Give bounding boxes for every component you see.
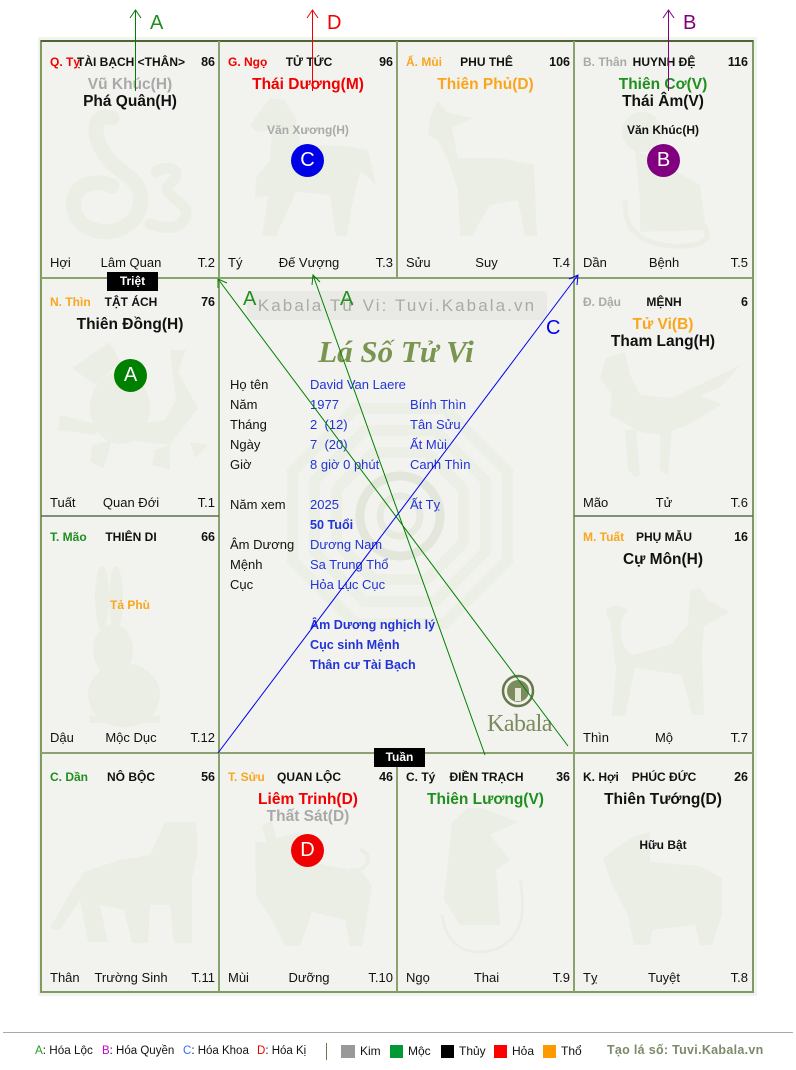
palace: Quan Lộc: D <box>300 839 315 861</box>
palace: Điền Trạch: Ngọ <box>406 970 430 985</box>
palace: Nô Bộc: C. Dần <box>50 770 88 784</box>
palace: Tài Bạch: 86 <box>201 55 215 69</box>
palace: Quan Lộc <box>228 770 393 985</box>
arrow label D top: D <box>327 12 341 34</box>
palace: Phu Thê: 106 <box>549 55 570 69</box>
palace: Phụ Mẫu: Mộ <box>655 730 673 745</box>
palace: Phúc Đức: Hữu Bật <box>639 838 687 852</box>
palace: Huynh Đệ: 116 <box>728 55 748 69</box>
palace: Huynh Đệ: Thái Âm(V) <box>622 93 704 110</box>
palace: Tử Tức: Đế Vượng <box>279 255 339 270</box>
legend divider <box>326 1043 327 1060</box>
legend: five elements: Thủy <box>459 1044 486 1058</box>
palace: Quan Lộc: T. Sửu <box>228 770 265 784</box>
palace: Huynh Đệ: Bệnh <box>649 255 679 270</box>
legend: four transformations: D: Hóa Kị <box>257 1045 306 1057</box>
watermark: dog <box>606 588 730 716</box>
birth information block: Tháng <box>230 417 267 432</box>
legend: five elements: Mộc <box>408 1044 431 1058</box>
legend: four transformations: C: Hóa Khoa <box>183 1045 249 1057</box>
palace: Tật Ách: Thiên Đồng(H) <box>77 316 183 333</box>
logo: Kabala <box>487 674 552 737</box>
palace: Tử Tức: TỬ TỨC <box>286 55 332 69</box>
arrow: D up from Tử Tức <box>307 10 318 91</box>
watermark: rabbit <box>88 566 160 727</box>
legend: five elements: Thổ <box>561 1044 582 1058</box>
palace: Điền Trạch: Thiên Lương(V) <box>427 791 544 808</box>
palace: Huynh Đệ: B <box>657 149 670 171</box>
legend: five elements: Kim <box>360 1044 381 1058</box>
palace: Huynh Đệ: T.5 <box>731 255 748 270</box>
watermark: bagua emblem <box>286 402 514 630</box>
birth information block: Cục <box>230 577 253 592</box>
palace: Huynh Đệ: Thiên Cơ(V) <box>619 76 707 93</box>
palace: Tử Tức: Thái Dương(M) <box>252 76 364 93</box>
palace: Thiên Di: T. Mão <box>50 530 87 544</box>
palace: Mệnh: Mão <box>583 495 608 510</box>
arrow label A right: A <box>340 288 353 310</box>
palace: Huynh Đệ: Văn Khúc(H) <box>627 123 699 137</box>
palace: Điền Trạch: 36 <box>556 770 570 784</box>
palace: Mệnh: T.6 <box>731 495 748 510</box>
palace: Quan Lộc: QUAN LỘC <box>277 770 341 784</box>
birth information block: Giờ <box>230 457 252 472</box>
birth information block: Năm xem <box>230 497 286 512</box>
legend: five elements: Hỏa <box>512 1044 534 1058</box>
palace: Phụ Mẫu: T.7 <box>731 730 748 745</box>
arrow: A to top-left of centre <box>218 279 568 746</box>
marker: Tuần <box>374 748 425 767</box>
arrow label A left: A <box>243 288 256 310</box>
birth information block: Tân Sửu <box>410 417 461 432</box>
palace: Tử Tức <box>228 55 393 270</box>
palace: Phúc Đức: T.8 <box>731 970 748 985</box>
birth information block: 8 giờ 0 phút <box>310 457 379 472</box>
palace: Phu Thê: Sửu <box>406 255 431 270</box>
palace: Mệnh <box>583 295 748 510</box>
palace: Phụ Mẫu: Cự Môn(H) <box>623 551 703 568</box>
watermark: snake <box>74 117 186 232</box>
watermark: horse <box>250 98 376 236</box>
palace: Quan Lộc: Liêm Trinh(D) <box>258 791 358 808</box>
palace: Huynh Đệ: HUYNH ĐỆ <box>633 55 695 69</box>
birth information block: Mệnh <box>230 557 263 572</box>
palace: Phúc Đức: K. Hợi <box>583 770 619 784</box>
palace: Nô Bộc <box>50 770 215 985</box>
arrow label C: C <box>546 317 560 339</box>
palace: Huynh Đệ <box>583 55 748 270</box>
palace: Điền Trạch: Thai <box>474 970 499 985</box>
birth information block: 7 (20) <box>310 437 348 452</box>
birth information block: 50 Tuổi <box>310 518 353 532</box>
palace: Thiên Di: 66 <box>201 530 215 544</box>
palace: Tật Ách: 76 <box>201 295 215 309</box>
palace: Phu Thê: T.4 <box>553 255 570 270</box>
birth information block: 2025 <box>310 497 339 512</box>
marker: Tuần: Tuần <box>386 750 413 764</box>
legend: four transformations <box>35 1044 306 1057</box>
legend: four transformations: A: Hóa Lộc <box>35 1044 93 1057</box>
marker: Triệt: Triệt <box>120 274 145 288</box>
palace: Điền Trạch: C. Tý <box>406 770 435 784</box>
palace: Tử Tức: G. Ngọ <box>228 55 267 69</box>
arrow: A to Đế Vượng <box>312 275 485 755</box>
palace: Tài Bạch <box>50 55 215 270</box>
palace: Tật Ách: TẬT ÁCH <box>105 295 157 309</box>
palace: Thiên Di: T.12 <box>190 730 215 745</box>
palace: Nô Bộc: Trường Sinh <box>94 970 168 985</box>
palace: Tài Bạch: Lâm Quan <box>101 255 161 270</box>
birth information block: Bính Thìn <box>410 397 466 412</box>
birth information block: Năm <box>230 397 257 412</box>
palace: Thiên Di <box>50 530 215 745</box>
palace: Phụ Mẫu: Thìn <box>583 730 609 745</box>
palace: Nô Bộc: NÔ BỘC <box>107 770 155 784</box>
birth information block: Sa Trung Thổ <box>310 557 389 572</box>
palace: Tật Ách: A <box>124 364 137 386</box>
palace: Mệnh: Tham Lang(H) <box>611 333 715 350</box>
arrow: A up from Tài Bạch <box>130 10 141 91</box>
birth information block: Cục sinh Mệnh <box>310 638 400 652</box>
arrow label A top: A <box>150 12 163 34</box>
arrow: C to top-right of centre <box>218 275 578 753</box>
palace: Tử Tức: Văn Xương(H) <box>267 123 349 137</box>
palace: Quan Lộc: T.10 <box>368 970 393 985</box>
palace: Mệnh: Đ. Dậu <box>583 295 621 309</box>
palace: Mệnh: Tử <box>656 495 672 510</box>
palace: Tật Ách: Tuất <box>50 495 76 510</box>
birth information block: David Van Laere <box>310 377 406 392</box>
watermark banner: Kabala Tử Vi: Tuvi.Kabala.vn <box>258 296 536 315</box>
watermark: tiger <box>50 822 198 943</box>
palace: Điền Trạch <box>406 770 570 985</box>
watermark: rooster <box>600 352 740 477</box>
palace: Tài Bạch: T.2 <box>198 255 215 270</box>
palace: Điền Trạch: T.9 <box>553 970 570 985</box>
watermark banner <box>247 291 547 320</box>
palace: Phúc Đức: 26 <box>734 770 748 784</box>
palace: Thiên Di: THIÊN DI <box>105 530 157 544</box>
palace: Nô Bộc: Thân <box>50 970 80 985</box>
palace: Phu Thê: Ấ. Mùi <box>406 55 442 69</box>
legend: five elements <box>341 1044 582 1058</box>
palace: Mệnh: Tử Vi(B) <box>633 316 693 333</box>
palace: Quan Lộc: Mùi <box>228 970 249 985</box>
birth information block: Họ tên <box>230 377 268 392</box>
footer credit: Tạo lá số: Tuvi.Kabala.vn <box>607 1043 764 1057</box>
palace: Phụ Mẫu: M. Tuất <box>583 530 624 544</box>
palace: Tử Tức: 96 <box>379 55 393 69</box>
birth information block: Hỏa Lục Cục <box>310 577 385 592</box>
palace: Điền Trạch: ĐIỀN TRẠCH <box>450 770 524 784</box>
footer rule <box>3 1032 793 1033</box>
birth information block: Ất Tỵ <box>410 497 440 512</box>
watermark: ox <box>255 820 372 946</box>
palace: Phụ Mẫu <box>583 530 748 745</box>
palace: Mệnh: 6 <box>741 295 748 309</box>
palace: Nô Bộc: 56 <box>201 770 215 784</box>
birth information block <box>230 377 470 672</box>
title: Lá Số Tử Vi: Lá Số Tử Vi <box>318 334 474 369</box>
palace: Thiên Di: Tả Phù <box>110 598 150 612</box>
legend: four transformations: B: Hóa Quyền <box>102 1045 174 1057</box>
palace: Quan Lộc: Dưỡng <box>288 970 330 985</box>
watermark: monkey <box>622 112 707 246</box>
birth information block: Âm Dương nghịch lý <box>310 618 435 632</box>
palace: Tật Ách: T.1 <box>198 495 215 510</box>
palace: Thiên Di: Mộc Dục <box>105 730 157 745</box>
palace: Tật Ách <box>50 295 215 510</box>
arrow: B up from Huynh Đệ <box>663 10 674 91</box>
palace: Phụ Mẫu: 16 <box>734 530 748 544</box>
palace: Phúc Đức: PHÚC ĐỨC <box>632 770 696 784</box>
palace: Tử Tức: C <box>300 149 315 171</box>
birth information block: 2 (12) <box>310 417 348 432</box>
palace: Tật Ách: Quan Đới <box>103 495 159 510</box>
palace: Quan Lộc: 46 <box>379 770 393 784</box>
palace: Tài Bạch: Phá Quân(H) <box>83 93 177 110</box>
watermark: rat <box>442 808 523 952</box>
birth information block: Thân cư Tài Bạch <box>310 658 416 672</box>
palace: Huynh Đệ: B. Thân <box>583 55 627 69</box>
palace: Tử Tức: T.3 <box>376 255 393 270</box>
birth information block: Ngày <box>230 437 260 452</box>
palace: Phụ Mẫu: PHỤ MẪU <box>636 530 692 544</box>
palace: Tật Ách: N. Thìn <box>50 295 91 309</box>
palace: Nô Bộc: T.11 <box>191 970 215 985</box>
palace: Phúc Đức: Thiên Tướng(D) <box>604 791 722 808</box>
birth information block: Canh Thìn <box>410 457 470 472</box>
palace: Phu Thê <box>406 55 570 270</box>
birth information block: 1977 <box>310 397 339 412</box>
palace: Phu Thê: PHU THÊ <box>460 55 513 69</box>
palace: Phu Thê: Thiên Phủ(D) <box>437 76 534 93</box>
logo: Kabala: Kabala <box>487 711 552 737</box>
palace: Phúc Đức: Tỵ <box>583 970 597 985</box>
birth information block: Dương Nam <box>310 537 382 552</box>
palace: Tài Bạch: Vũ Khúc(H) <box>88 76 172 93</box>
marker: Triệt <box>107 272 158 291</box>
birth information block: Âm Dương <box>230 537 294 552</box>
watermark: goat <box>428 100 537 236</box>
palace: Phu Thê: Suy <box>475 255 498 270</box>
palace: Mệnh: MỆNH <box>646 295 682 309</box>
watermark: dragon <box>58 342 208 470</box>
palace: Phúc Đức <box>583 770 748 985</box>
palace: Phúc Đức: Tuyệt <box>648 970 680 985</box>
palace: Huynh Đệ: Dần <box>583 255 607 270</box>
palace: Tài Bạch: Q. Tỵ <box>50 55 80 69</box>
palace: Quan Lộc: Thất Sát(D) <box>267 808 349 825</box>
palace: Thiên Di: Dậu <box>50 730 74 745</box>
arrow label B top: B <box>683 12 696 34</box>
palace: Tài Bạch: TÀI BẠCH <THÂN> <box>77 55 185 69</box>
birth information block: Ất Mùi <box>410 437 447 452</box>
palace: Tử Tức: Tý <box>228 255 242 270</box>
palace: Tài Bạch: Hợi <box>50 255 71 270</box>
watermark: pig <box>603 832 722 945</box>
